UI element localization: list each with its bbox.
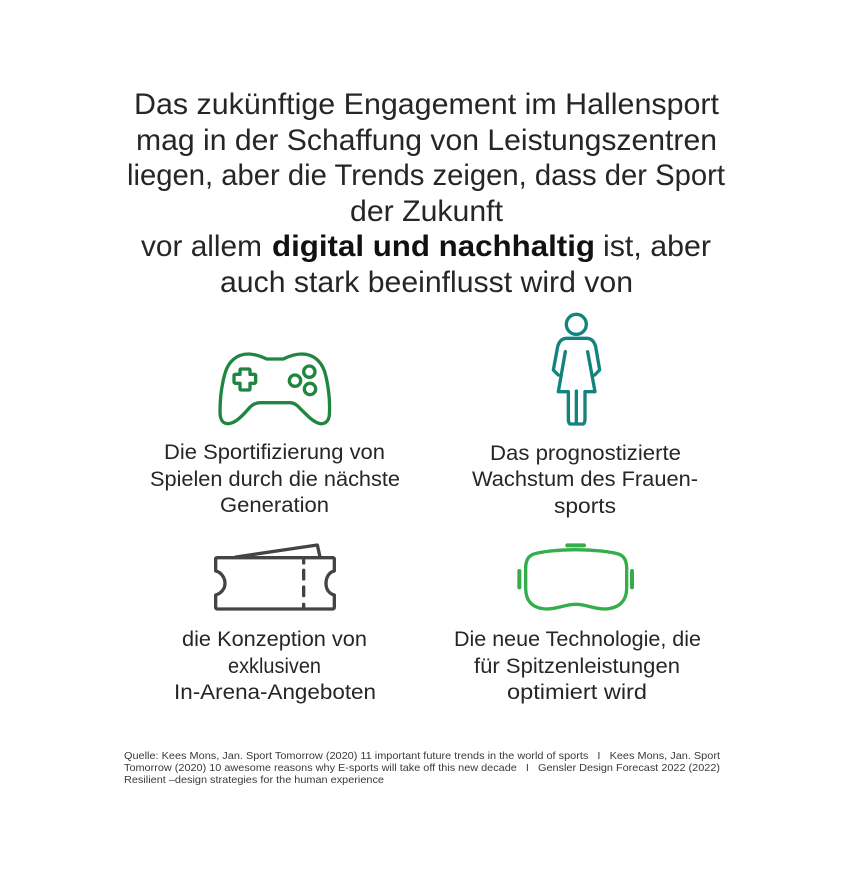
label: In-Arena-Angebote: exklusiven bbox=[228, 655, 321, 678]
label: Technologie: für Spitzenleistungen bbox=[474, 655, 680, 678]
label: Frauensport: Wachstum des Frauen- bbox=[472, 468, 698, 491]
label: In-Arena-Angebote: die Konzeption von bbox=[182, 628, 367, 651]
title: vor allem bbox=[141, 230, 262, 263]
label: In-Arena-Angebote: In-Arena-Angeboten bbox=[174, 681, 376, 704]
title: auch stark beeinflusst wird von bbox=[220, 266, 633, 299]
title: digital und nachhaltig bbox=[272, 230, 595, 263]
label: Frauensport bbox=[472, 442, 698, 518]
icon: VR headset bbox=[519, 545, 632, 609]
label: Sportifizierung bbox=[150, 441, 400, 517]
source note: Quelle: Kees Mons, Jan. Sport Tomorrow (2020) 11 important future trends in the world of sports I Kees Mons, Jan. Sport bbox=[124, 750, 720, 762]
source note bbox=[124, 750, 720, 786]
title: ist, aber bbox=[603, 230, 711, 263]
source note: Tomorrow (2020) 10 awesome reasons why E-sports will take off this new decade I Gensler Design Forecast 2022 (2022) bbox=[124, 762, 720, 774]
icon: game controller bbox=[220, 354, 330, 424]
label: Sportifizierung: Die Sportifizierung von bbox=[164, 441, 385, 464]
label: Technologie: optimiert wird bbox=[507, 681, 647, 704]
label: Frauensport: Das prognostizierte bbox=[490, 442, 681, 465]
label: Sportifizierung: Generation bbox=[220, 494, 329, 517]
label: In-Arena-Angebote bbox=[174, 628, 376, 704]
title: liegen, aber die Trends zeigen, dass der Sport bbox=[127, 159, 726, 192]
title bbox=[127, 88, 726, 299]
title: der Zukunft bbox=[350, 195, 504, 228]
icon: ticket bbox=[216, 545, 334, 609]
source note: Resilient –design strategies for the human experience bbox=[124, 774, 384, 786]
label: Frauensport: sports bbox=[554, 495, 616, 518]
title: Das zukünftige Engagement im Hallensport bbox=[134, 88, 720, 121]
icon: woman bbox=[553, 314, 600, 424]
label: Sportifizierung: Spielen durch die nächste bbox=[150, 468, 400, 491]
label: Technologie bbox=[454, 628, 701, 704]
title: mag in der Schaffung von Leistungszentren bbox=[136, 124, 717, 157]
label: Technologie: Die neue Technologie, die bbox=[454, 628, 701, 651]
